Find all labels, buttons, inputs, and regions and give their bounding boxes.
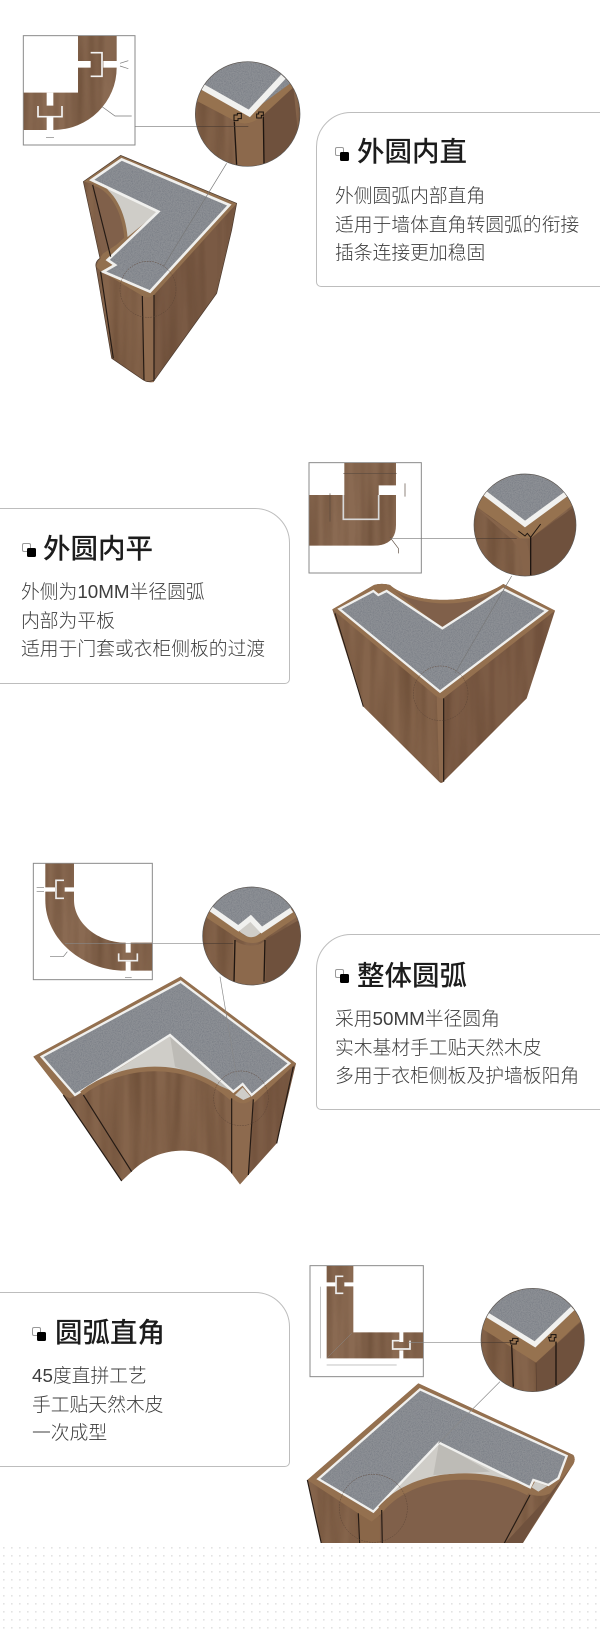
profile drawing: arc right angle xyxy=(310,1266,423,1377)
icon: overlapping squares xyxy=(32,1327,46,1341)
description: 适用于门套或衣柜侧板的过渡 xyxy=(21,638,265,659)
heading: 圆弧直角 xyxy=(55,1317,165,1348)
heading: 整体圆弧 xyxy=(357,960,467,991)
description: 适用于墙体直角转圆弧的衔接 xyxy=(335,214,579,234)
main object xyxy=(332,584,555,783)
icon: overlapping squares xyxy=(335,969,349,983)
description: 采用50MM半径圆角 xyxy=(335,1008,500,1029)
detail circle xyxy=(193,60,302,168)
panel: 圆弧直角 xyxy=(0,1292,290,1467)
section 2 illustration xyxy=(309,463,577,783)
panel: 外圆内平 xyxy=(0,508,290,684)
detail circle xyxy=(473,473,577,577)
description: 外侧圆弧内部直角 xyxy=(335,185,485,206)
description: 一次成型 xyxy=(32,1422,107,1443)
section 1 illustration xyxy=(23,36,302,382)
leader lines xyxy=(390,538,512,673)
dotted footer background xyxy=(0,1543,600,1635)
description: 外侧为10MM半径圆弧 xyxy=(21,581,205,602)
description xyxy=(21,581,265,659)
description: 实木基材手工贴天然木皮 xyxy=(335,1036,542,1058)
section 3 illustration xyxy=(33,863,302,1184)
heading: 外圆内平 xyxy=(43,533,153,564)
description: 45度直拼工艺 xyxy=(32,1365,147,1386)
description: 插条连接更加稳固 xyxy=(335,242,485,263)
leader lines xyxy=(65,943,237,1077)
description: 多用于衣柜侧板及护墙板阳角 xyxy=(335,1065,579,1086)
section 4 illustration xyxy=(307,1266,587,1545)
description: 手工贴天然木皮 xyxy=(32,1394,163,1414)
heading: 外圆内直 xyxy=(357,136,467,167)
leader lines xyxy=(408,1343,500,1443)
detail circle xyxy=(480,1287,587,1394)
detail circle xyxy=(202,886,302,986)
main object xyxy=(33,977,296,1184)
profile drawing: outer arc inner right angle xyxy=(23,36,135,145)
description: 内部为平板 xyxy=(21,610,115,630)
leader lines xyxy=(135,127,227,267)
main object xyxy=(307,1383,575,1545)
main object xyxy=(83,155,237,382)
panel: 外圆内直 xyxy=(316,112,600,287)
description xyxy=(335,185,579,263)
description xyxy=(32,1365,163,1443)
icon: overlapping squares xyxy=(335,147,349,161)
icon: overlapping squares xyxy=(22,543,36,557)
profile drawing: outer arc inner flat xyxy=(309,463,421,573)
description xyxy=(335,1008,579,1086)
profile drawing: full arc xyxy=(33,863,152,980)
panel: 整体圆弧 xyxy=(316,934,600,1110)
